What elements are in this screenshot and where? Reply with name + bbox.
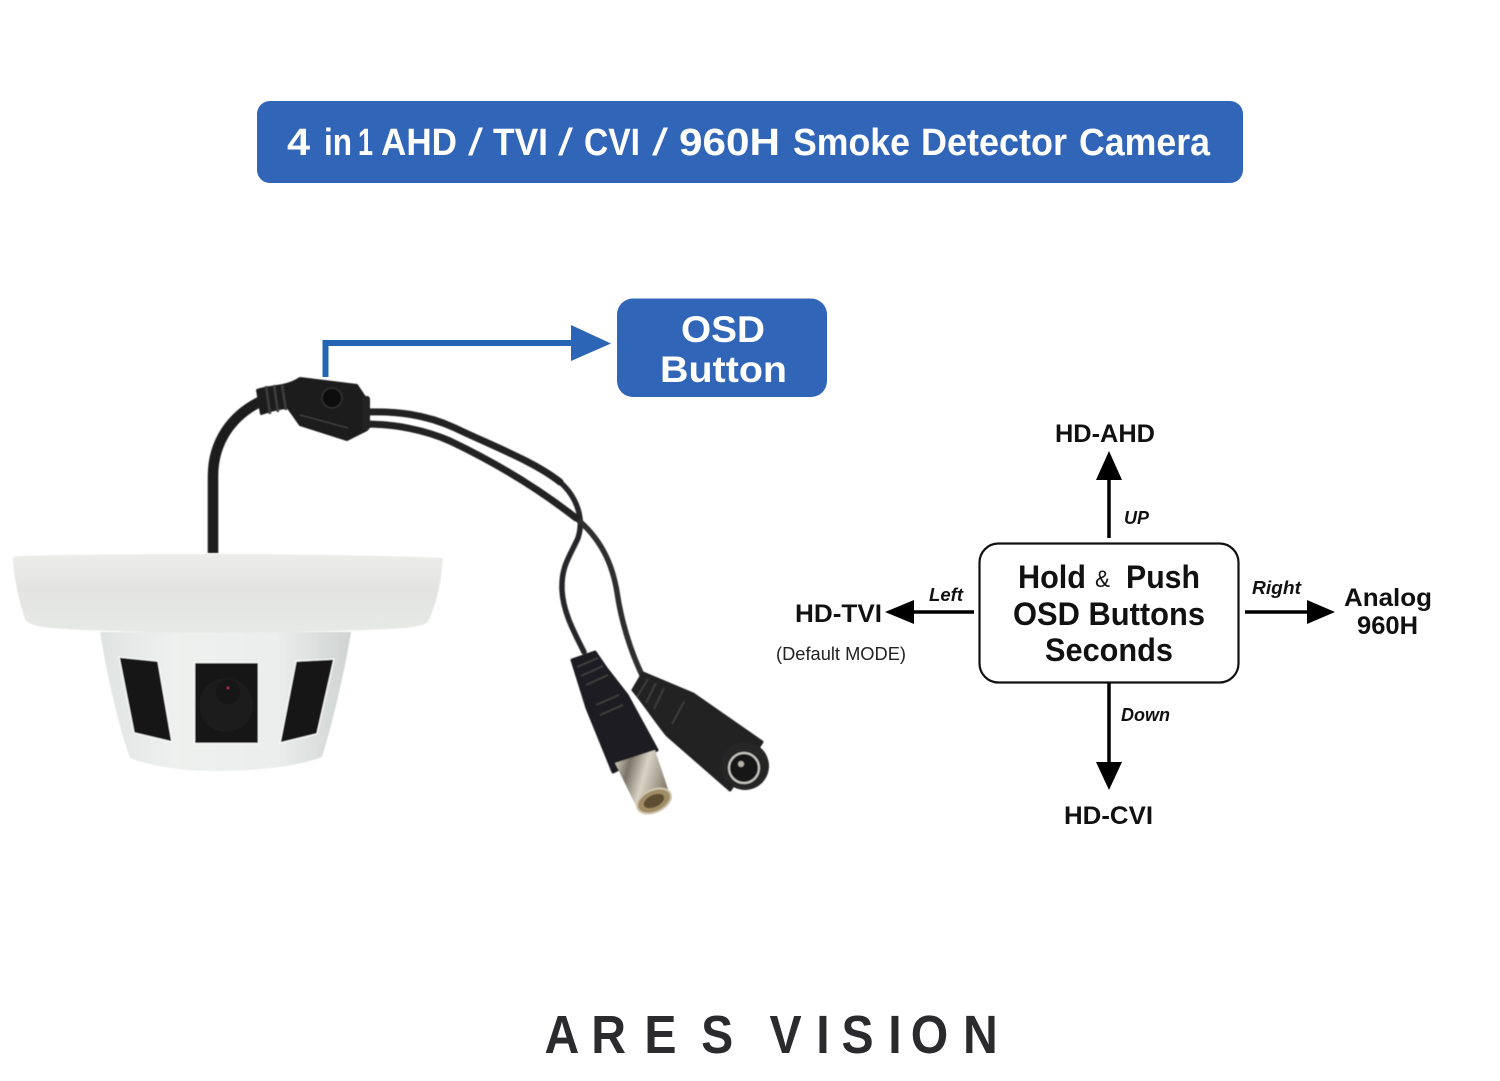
title banner: CVI	[584, 122, 640, 164]
brand logo: E	[644, 1005, 677, 1065]
BNC plug	[572, 652, 675, 819]
centre instruction box: Seconds	[1045, 632, 1173, 668]
title banner: Camera	[1079, 122, 1211, 164]
title banner: 1	[358, 122, 373, 164]
centre instruction box: Hold	[1018, 559, 1086, 595]
brand logo: A	[545, 1005, 579, 1065]
mode label: HD-AHD: HD-AHD	[1055, 420, 1155, 448]
mode label: HD-CVI: HD-CVI	[1064, 802, 1153, 830]
mode selection diagram	[776, 420, 1432, 830]
mode label: Analog 960H: Analog	[1344, 584, 1432, 612]
DC jack	[633, 673, 769, 790]
title banner: 4	[287, 122, 310, 164]
mode label: Analog 960H	[1344, 584, 1432, 640]
title banner: 960H	[679, 122, 780, 164]
ceiling rim	[13, 554, 443, 632]
arrow up	[1096, 451, 1122, 538]
OSD button label	[617, 298, 827, 397]
centre instruction box: &	[1095, 566, 1110, 593]
centre instruction box: Push	[1126, 559, 1200, 595]
brand logo: I	[816, 1005, 830, 1065]
OSD button label: Button	[660, 349, 787, 390]
split cables	[365, 412, 642, 675]
default mode note: (Default MODE)	[776, 644, 906, 664]
camera lens	[199, 678, 253, 732]
title banner	[257, 101, 1243, 183]
centre instruction box	[980, 544, 1238, 682]
title banner: TVI	[493, 122, 548, 164]
brand logo: S	[842, 1005, 874, 1065]
lower housing	[100, 632, 351, 771]
arrow down	[1096, 683, 1122, 790]
title banner: /	[652, 122, 669, 164]
title banner: AHD	[381, 122, 457, 164]
title banner: /	[558, 122, 574, 164]
mode label: Analog 960H: 960H	[1357, 612, 1418, 640]
brand logo: S	[701, 1005, 733, 1065]
direction label: Left: Left	[929, 585, 964, 605]
OSD button label: OSD	[681, 309, 765, 350]
direction label: Down: Down	[1121, 705, 1170, 725]
arrow right	[1245, 600, 1335, 624]
brand logo: R	[591, 1005, 626, 1065]
arrow left	[885, 600, 974, 624]
callout arrow to OSD button	[326, 325, 611, 377]
smoke detector camera photo illustration	[13, 378, 769, 819]
title banner: in	[324, 122, 352, 164]
brand logo: V	[770, 1005, 802, 1065]
direction label: UP: UP	[1124, 508, 1150, 528]
centre instruction box: OSD Buttons	[1013, 596, 1205, 632]
title banner: /	[468, 122, 484, 164]
brand logo: O	[911, 1005, 948, 1065]
housing windows	[119, 657, 334, 744]
direction label: Right: Right	[1252, 578, 1302, 598]
inline OSD connector	[257, 378, 370, 440]
title banner: Detector	[921, 122, 1067, 164]
main cable	[213, 399, 266, 553]
brand logo: N	[963, 1005, 998, 1065]
title banner: Smoke	[793, 122, 910, 164]
mode label: HD-TVI: HD-TVI	[795, 600, 882, 628]
brand logo: I	[888, 1005, 902, 1065]
